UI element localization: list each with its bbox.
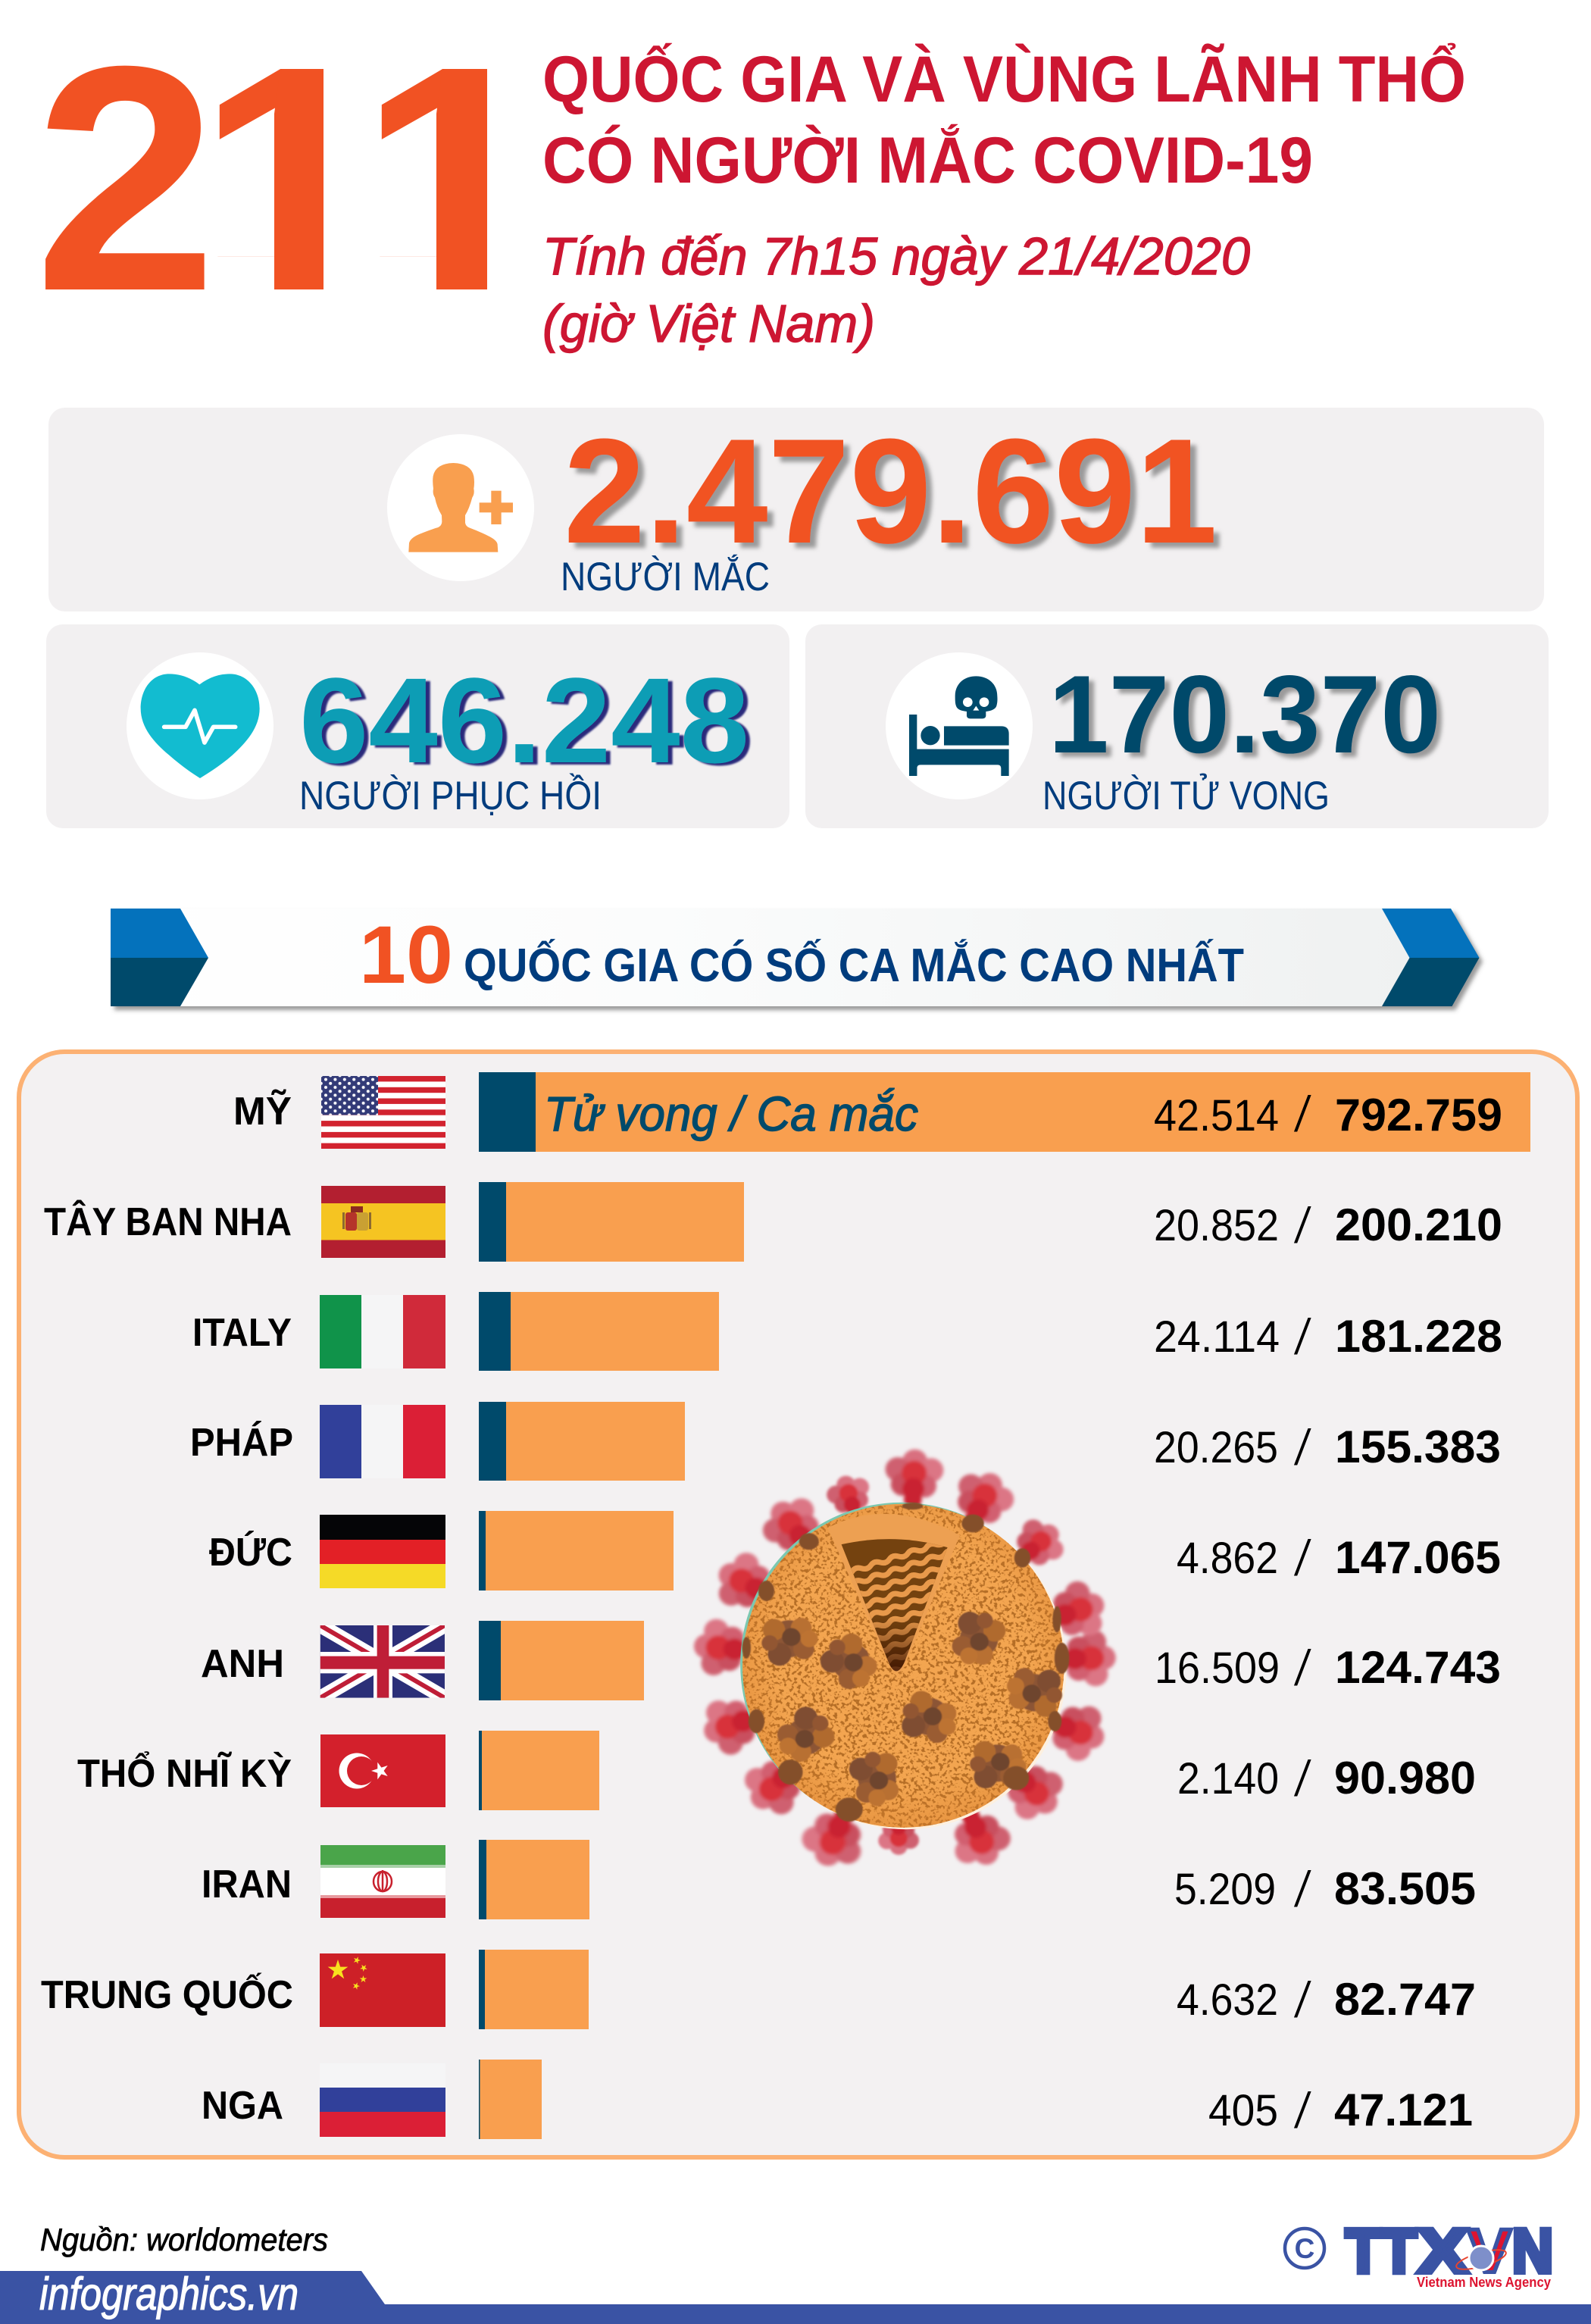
website label: infographics.vn xyxy=(39,2269,299,2319)
big number 211: 1 xyxy=(358,0,554,358)
values: 405 xyxy=(1208,2086,1278,2135)
values: / xyxy=(1294,1750,1311,1806)
subtitle: date: (giờ Việt Nam) xyxy=(542,294,875,353)
logo: TTXVN xyxy=(1346,2217,1553,2290)
values: 20.265 xyxy=(1154,1423,1278,1472)
flag: Spain xyxy=(321,1186,445,1258)
big number 211 xyxy=(34,0,554,358)
label: deaths: NGƯỜI TỬ VONG xyxy=(1042,773,1330,818)
row: Trung Quốc xyxy=(41,1950,1476,2029)
bar xyxy=(479,1292,719,1371)
title: CÓ NGƯỜI MẮC COVID-19 xyxy=(542,124,1313,197)
logo: copyright xyxy=(1285,2229,1324,2268)
flag: Germany xyxy=(320,1515,445,1588)
icon: bed and skull xyxy=(886,652,1033,799)
values: 47.121 xyxy=(1334,2085,1473,2135)
heading: top ten countries: QUỐC GIA CÓ SỐ CA MẮC CAO NHẤT xyxy=(464,940,1244,992)
label: THỔ NHĨ KỲ xyxy=(77,1751,292,1796)
values xyxy=(1154,1086,1502,1142)
label: recovered: NGƯỜI PHỤC HỒI xyxy=(299,773,602,818)
values xyxy=(1174,1861,1476,1917)
big number 211: 2 xyxy=(34,0,217,358)
values: 200.210 xyxy=(1335,1200,1502,1250)
label: ITALY xyxy=(192,1311,292,1355)
bar xyxy=(479,1840,589,1919)
number: recovered: 646.248 xyxy=(299,652,749,788)
logo: TTXVN: V xyxy=(1468,2217,1511,2285)
label: PHÁP xyxy=(190,1421,293,1465)
values: 20.852 xyxy=(1154,1201,1279,1250)
legend: deaths over cases: Tử vong / Ca mắc xyxy=(544,1087,918,1141)
logo: TTXVN: N xyxy=(1512,2217,1553,2285)
values: / xyxy=(1294,1086,1311,1142)
values xyxy=(1154,1309,1502,1365)
number: deaths: 170.370 xyxy=(1049,652,1441,776)
values: 90.980 xyxy=(1334,1753,1476,1803)
title: QUỐC GIA VÀ VÙNG LÃNH THỔ xyxy=(542,43,1466,116)
panel: deaths xyxy=(805,624,1549,828)
label: MỸ xyxy=(233,1089,292,1134)
icon: heart xyxy=(127,652,274,799)
values: 4.632 xyxy=(1177,1975,1278,2025)
values: 155.383 xyxy=(1335,1422,1501,1472)
values: / xyxy=(1294,1530,1311,1586)
section banner xyxy=(111,909,1479,1006)
values: / xyxy=(1294,1197,1311,1253)
values: / xyxy=(1294,1640,1311,1696)
values xyxy=(1154,1197,1502,1253)
label: TÂY BAN NHA xyxy=(44,1200,292,1244)
label: IRAN xyxy=(202,1863,292,1906)
label: TRUNG QUỐC xyxy=(41,1972,293,2017)
logo: TTXVN: TT xyxy=(1346,2217,1417,2285)
heading: number 10: 10 xyxy=(359,909,453,1000)
label: cases: NGƯỜI MẮC xyxy=(561,553,770,599)
big number 211: 1 xyxy=(195,0,392,358)
values: / xyxy=(1294,1972,1311,2028)
bar xyxy=(479,1072,1530,1152)
logo: TTXVN: Vietnam News Agency xyxy=(1417,2275,1551,2290)
values: 5.209 xyxy=(1174,1865,1276,1914)
icon: left chevron xyxy=(111,909,208,1006)
values: 82.747 xyxy=(1334,1974,1476,2025)
values xyxy=(1177,1530,1501,1586)
flag: Iran xyxy=(320,1845,445,1918)
label: NGA xyxy=(202,2084,283,2128)
row: Iran xyxy=(202,1840,1476,1919)
panel: ranking xyxy=(19,1052,1577,2157)
values: / xyxy=(1294,2082,1311,2138)
bar xyxy=(479,1621,644,1700)
values: / xyxy=(1294,1861,1311,1917)
values: 4.862 xyxy=(1177,1534,1278,1583)
logo: TTXVN: X xyxy=(1418,2217,1468,2285)
subtitle: date xyxy=(542,227,1250,353)
values xyxy=(1154,1419,1501,1475)
bar xyxy=(479,1402,685,1481)
icon: person plus xyxy=(387,434,534,581)
bar xyxy=(479,1950,589,2029)
row: Italy xyxy=(192,1292,1502,1371)
row: Nga xyxy=(202,2060,1473,2139)
flag: Italy xyxy=(320,1295,445,1368)
values: 16.509 xyxy=(1155,1644,1280,1693)
values: 124.743 xyxy=(1335,1642,1501,1693)
title xyxy=(542,43,1466,197)
panel: recovered xyxy=(46,624,789,828)
values: 42.514 xyxy=(1154,1091,1279,1140)
values xyxy=(1177,1972,1476,2028)
row: Tây Ban Nha xyxy=(44,1182,1502,1262)
illustration: coronavirus xyxy=(691,1448,1117,1876)
values: / xyxy=(1294,1309,1311,1365)
values: 181.228 xyxy=(1335,1311,1502,1362)
values: / xyxy=(1294,1419,1311,1475)
row: Đức xyxy=(209,1511,1501,1591)
flag: USA xyxy=(321,1076,445,1149)
icon: right chevron xyxy=(1382,909,1479,1006)
values: 2.140 xyxy=(1177,1754,1279,1803)
values: 24.114 xyxy=(1154,1312,1280,1362)
label: ĐỨC xyxy=(209,1531,292,1575)
values: 147.065 xyxy=(1335,1532,1501,1583)
flag: Turkey xyxy=(320,1734,445,1807)
bar xyxy=(479,1731,599,1810)
source note: Nguồn: worldometers xyxy=(40,2222,328,2257)
bar xyxy=(479,2060,542,2139)
flag: China xyxy=(320,1953,445,2027)
values xyxy=(1177,1750,1476,1806)
values xyxy=(1155,1640,1501,1696)
footer bar xyxy=(0,2271,1591,2324)
row: Thổ Nhĩ Kỳ xyxy=(77,1731,1476,1810)
subtitle: date: Tính đến 7h15 ngày 21/4/2020 xyxy=(542,227,1250,286)
values: 83.505 xyxy=(1334,1863,1476,1914)
row: Pháp xyxy=(190,1402,1501,1481)
logo: copyright: C xyxy=(1295,2233,1314,2264)
panel: total cases xyxy=(48,408,1544,611)
row: Mỹ xyxy=(233,1072,1530,1152)
bar xyxy=(479,1511,674,1591)
flag: Russia xyxy=(320,2063,445,2137)
values xyxy=(1208,2082,1473,2138)
label: ANH xyxy=(201,1642,284,1686)
flag: France xyxy=(320,1405,445,1478)
values: 792.759 xyxy=(1335,1090,1502,1140)
bar xyxy=(479,1182,744,1262)
flag: UK xyxy=(320,1625,445,1698)
number: cases: 2.479.691 xyxy=(564,408,1217,574)
row: Anh xyxy=(201,1621,1501,1700)
